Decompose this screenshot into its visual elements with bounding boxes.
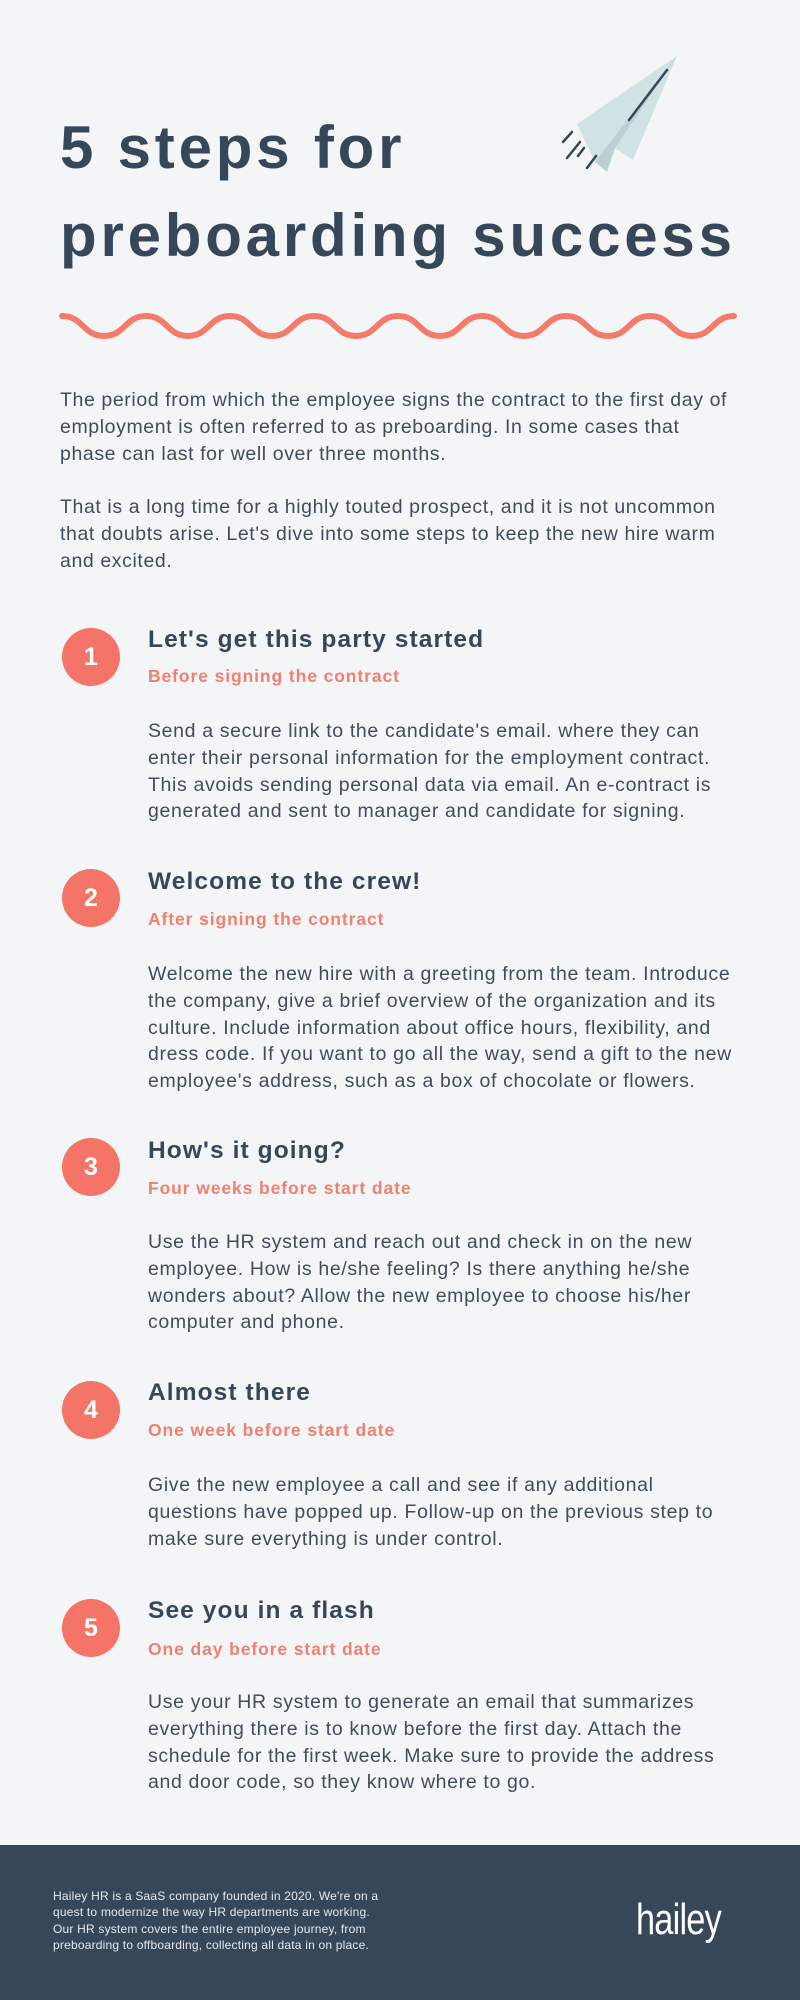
step 3 body: wonders about? Allow the new employee to choose his/her [148,1285,691,1307]
step 4 body: questions have popped up. Follow-up on the previous step to [148,1501,713,1523]
intro text: that doubts arise. Let's dive into some steps to keep the new hire warm [60,523,715,545]
step 5 body: and door code, so they know where to go. [148,1771,536,1793]
step 1 subtitle: Before signing the contract [148,666,400,686]
step 2 body: Welcome the new hire with a greeting from the team. Introduce [148,963,730,985]
title: 5 steps for [60,114,405,181]
step 1 [62,626,711,822]
step 1 number [62,628,120,686]
step 3 body: Use the HR system and reach out and check in on the new [148,1231,692,1253]
step 1 heading: Let's get this party started [148,626,484,653]
intro text [60,389,727,572]
logo: hailey: hailey [636,1895,721,1944]
step 1 number: 1 [84,643,98,671]
step 5 [62,1597,714,1793]
step 3 body [148,1231,692,1333]
step 4 heading: Almost there [148,1379,311,1406]
title [60,114,736,269]
step 2 body [148,963,732,1092]
step 1 body [148,720,711,822]
intro text: and excited. [60,550,172,572]
step 5 subtitle: One day before start date [148,1639,382,1659]
wave divider [59,313,737,339]
step 4 subtitle: One week before start date [148,1420,395,1440]
footer text: Our HR system covers the entire employee journey, from [53,1922,366,1936]
intro text: That is a long time for a highly touted prospect, and it is not uncommon [60,496,716,518]
step 5 body [148,1691,714,1793]
icon: paper plane [562,56,677,172]
step 2 number: 2 [84,884,98,912]
step 3 number: 3 [84,1153,98,1181]
footer text: Hailey HR is a SaaS company founded in 2020. We're on a [53,1889,378,1903]
step 4 number [62,1381,120,1439]
intro text: phase can last for well over three months. [60,443,446,465]
step 2 subtitle: After signing the contract [148,909,384,929]
step 4 body [148,1474,713,1550]
footer [0,1845,800,2000]
footer text: preboarding to offboarding, collecting all data in on place. [53,1938,369,1952]
step 4 [62,1379,713,1550]
step 3 subtitle: Four weeks before start date [148,1178,411,1198]
step 1 body: This avoids sending personal data via email. An e-contract is [148,774,711,796]
step 3 [62,1137,692,1333]
step 1 body: Send a secure link to the candidate's email. where they can [148,720,700,742]
step 2 heading: Welcome to the crew! [148,868,421,895]
title: preboarding success [60,202,736,269]
step 1 body: enter their personal information for the employment contract. [148,747,710,769]
step 1 body: generated and sent to manager and candidate for signing. [148,800,685,822]
step 5 number [62,1599,120,1657]
step 5 body: schedule for the first week. Make sure to provide the address [148,1745,714,1767]
step 5 heading: See you in a flash [148,1597,375,1624]
intro text: employment is often referred to as preboarding. In some cases that [60,416,680,438]
step 2 number [62,869,120,927]
step 5 body: Use your HR system to generate an email that summarizes [148,1691,694,1713]
intro text: The period from which the employee signs the contract to the first day of [60,389,727,411]
step 4 body: make sure everything is under control. [148,1528,503,1550]
step 5 number: 5 [84,1614,98,1642]
footer text [53,1889,378,1952]
step 4 body: Give the new employee a call and see if any additional [148,1474,654,1496]
step 2 body: dress code. If you want to go all the way, send a gift to the new [148,1043,732,1065]
step 3 body: computer and phone. [148,1311,345,1333]
step 2 body: culture. Include information about office hours, flexibility, and [148,1017,711,1039]
step 2 [62,868,732,1092]
step 2 body: employee's address, such as a box of chocolate or flowers. [148,1070,696,1092]
step 3 body: employee. How is he/she feeling? Is there anything he/she [148,1258,690,1280]
step 3 heading: How's it going? [148,1137,346,1164]
step 3 number [62,1138,120,1196]
step 5 body: everything there is to know before the first day. Attach the [148,1718,682,1740]
footer text: quest to modernize the way HR departments are working. [53,1905,370,1919]
step 4 number: 4 [84,1396,98,1424]
step 2 body: the company, give a brief overview of the organization and its [148,990,716,1012]
